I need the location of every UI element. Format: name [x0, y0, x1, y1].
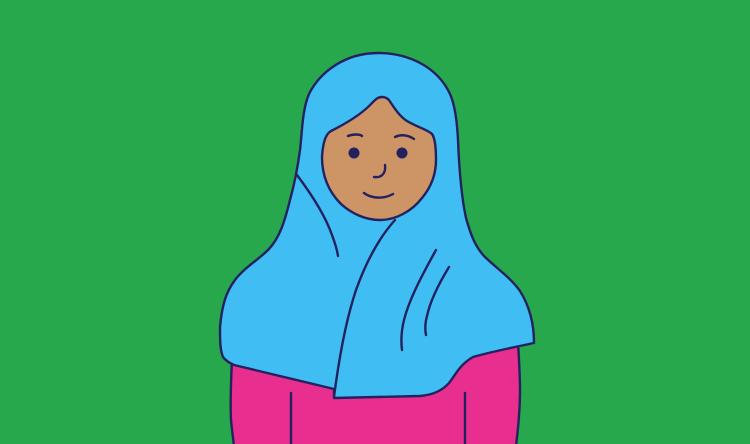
left eye [348, 148, 360, 158]
pink top [231, 342, 520, 444]
right eyebrow [395, 135, 414, 139]
drape crease lines [401, 250, 436, 350]
hijab left fold [297, 175, 338, 256]
blue hijab [220, 53, 534, 398]
left eyebrow [348, 134, 362, 136]
nose [374, 165, 385, 177]
mouth [364, 193, 393, 198]
right eye [396, 148, 408, 158]
hijab front fold [334, 220, 395, 397]
face [322, 97, 436, 220]
